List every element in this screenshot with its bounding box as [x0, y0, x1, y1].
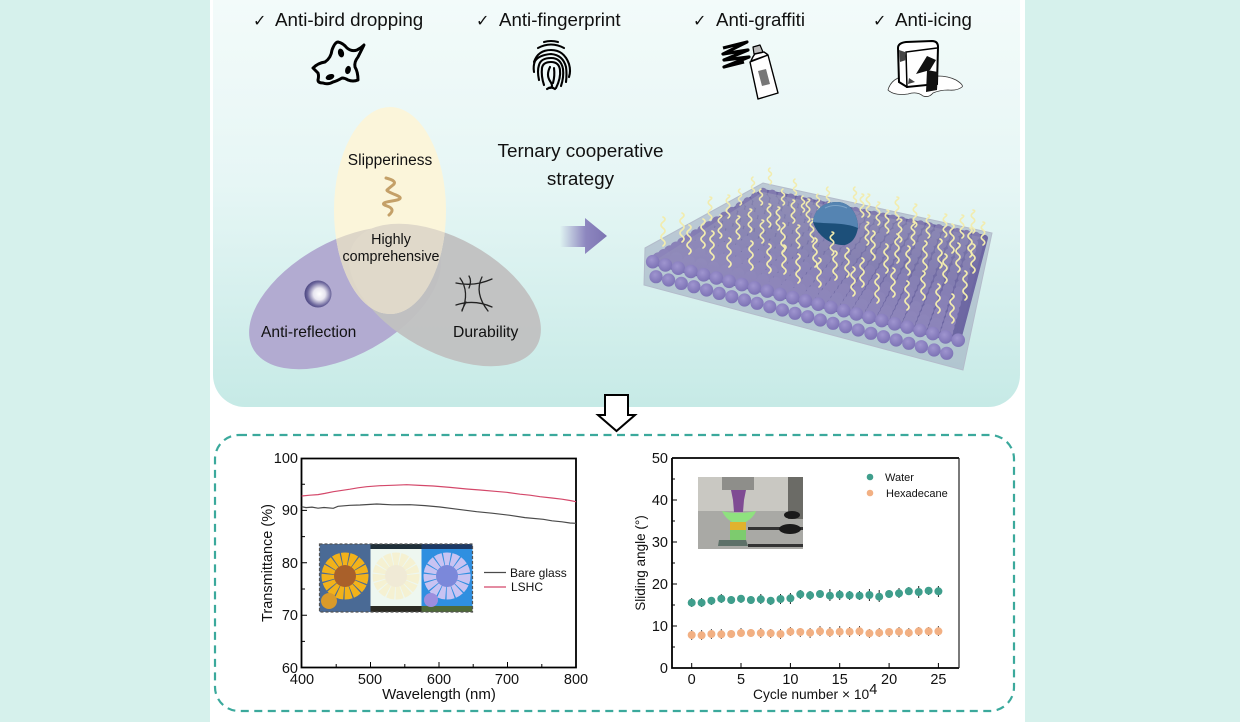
front sphere rows	[646, 255, 965, 360]
lobe: durability	[326, 194, 564, 396]
feature: anti-icing: ✓	[873, 11, 886, 30]
top sphere layer base	[653, 192, 985, 340]
y axis title: Transmittance (%)	[260, 504, 276, 622]
arrow: to coating	[560, 218, 607, 254]
water series	[688, 586, 942, 607]
legend: Hexadecane	[886, 488, 948, 500]
heading: ternary cooperative strategy: Ternary cooperative	[498, 141, 663, 162]
feature: anti-bird dropping: Anti-bird dropping	[275, 9, 423, 30]
feature: anti-bird dropping	[253, 9, 423, 84]
label: Anti-reflection: Anti-reflection	[261, 324, 356, 341]
y tick labels: 70	[282, 608, 298, 624]
feature: anti-fingerprint: Anti-fingerprint	[499, 9, 621, 30]
overlap	[336, 224, 444, 314]
axis ticks	[302, 484, 542, 667]
feature: anti-graffiti: ✓	[693, 11, 706, 30]
x tick labels: 600	[427, 672, 451, 688]
label: Highly comprehensive: comprehensive	[343, 249, 440, 265]
y tick labels: 40	[652, 493, 668, 509]
icon: nanoparticle	[304, 280, 332, 308]
lobe: slipperiness	[334, 107, 446, 314]
y tick labels: 10	[652, 619, 668, 635]
label: Slipperiness: Slipperiness	[348, 152, 432, 169]
x axis title: Cycle number × 10	[753, 687, 869, 702]
feature: anti-graffiti: Anti-graffiti	[716, 9, 805, 30]
y tick labels: 20	[652, 577, 668, 593]
feature: anti-icing: Anti-icing	[895, 9, 972, 30]
y tick labels: 60	[282, 661, 298, 677]
inset: test rig photo	[698, 477, 803, 549]
x tick labels: 500	[358, 672, 382, 688]
feature: anti-fingerprint: ✓	[476, 11, 489, 30]
coating illustration	[644, 168, 992, 370]
lobe: anti-reflection	[226, 197, 464, 399]
x tick labels: 0	[688, 672, 696, 688]
bare glass curve	[302, 504, 576, 523]
chart: sliding angle	[633, 451, 959, 702]
fluorinated chains	[661, 168, 985, 323]
y axis title: Sliding angle (°)	[633, 515, 648, 611]
page white column	[210, 0, 1025, 722]
label: Durability: Durability	[453, 324, 519, 341]
legend: Bare glass	[510, 566, 567, 580]
back haze	[653, 192, 985, 340]
feature: anti-graffiti	[693, 9, 805, 99]
infographic	[210, 0, 1025, 722]
x tick labels	[290, 672, 588, 688]
venn diagram	[249, 107, 541, 370]
x tick labels: 20	[881, 672, 897, 688]
feature: anti-fingerprint	[476, 9, 621, 89]
y tick labels: 50	[652, 451, 668, 467]
chart: transmittance	[260, 451, 588, 703]
top sphere layer	[658, 192, 985, 335]
y tick labels: 90	[282, 503, 298, 519]
x tick labels: 800	[564, 672, 588, 688]
glass slab	[644, 183, 992, 370]
plot frame	[302, 458, 576, 668]
y tick labels: 0	[660, 661, 668, 677]
water droplet	[813, 202, 858, 245]
icon: fingerprint	[534, 41, 570, 89]
y tick labels: 30	[652, 535, 668, 551]
feature: anti-icing	[873, 9, 972, 97]
feature: anti-bird dropping: ✓	[253, 11, 266, 30]
x axis title: 4	[869, 682, 877, 698]
legend	[867, 472, 948, 500]
x tick labels: 700	[495, 672, 519, 688]
icon: spray can	[723, 42, 778, 99]
label: Highly comprehensive: Highly	[371, 232, 411, 248]
x tick labels: 5	[737, 672, 745, 688]
icon: bird dropping	[313, 42, 364, 84]
x tick labels: 10	[782, 672, 798, 688]
inset: sunflower photos	[320, 544, 472, 612]
icon: wavy chain	[383, 178, 400, 215]
y tick labels: 100	[274, 451, 298, 467]
x tick labels: 15	[832, 672, 848, 688]
y tick labels	[274, 451, 298, 677]
arrow: down to results	[598, 395, 635, 431]
legend	[484, 566, 567, 594]
hexadecane series	[688, 626, 942, 640]
axis ticks	[672, 479, 938, 668]
x tick labels	[688, 672, 946, 688]
plot frame	[672, 458, 959, 668]
legend: Water	[885, 472, 914, 484]
panel: top strategy	[213, 0, 1020, 407]
x tick labels: 25	[930, 672, 946, 688]
y tick labels	[652, 451, 668, 677]
panel: results dashed frame	[215, 435, 1014, 711]
LSHC curve	[302, 485, 576, 502]
legend: LSHC	[511, 580, 543, 594]
heading: ternary cooperative strategy: strategy	[547, 169, 615, 190]
x axis title: Wavelength (nm)	[382, 686, 496, 703]
y tick labels: 80	[282, 556, 298, 572]
icon: network	[456, 276, 492, 311]
icon: ice cube	[888, 41, 962, 97]
chain over droplet	[830, 232, 834, 255]
x tick labels: 400	[290, 672, 314, 688]
